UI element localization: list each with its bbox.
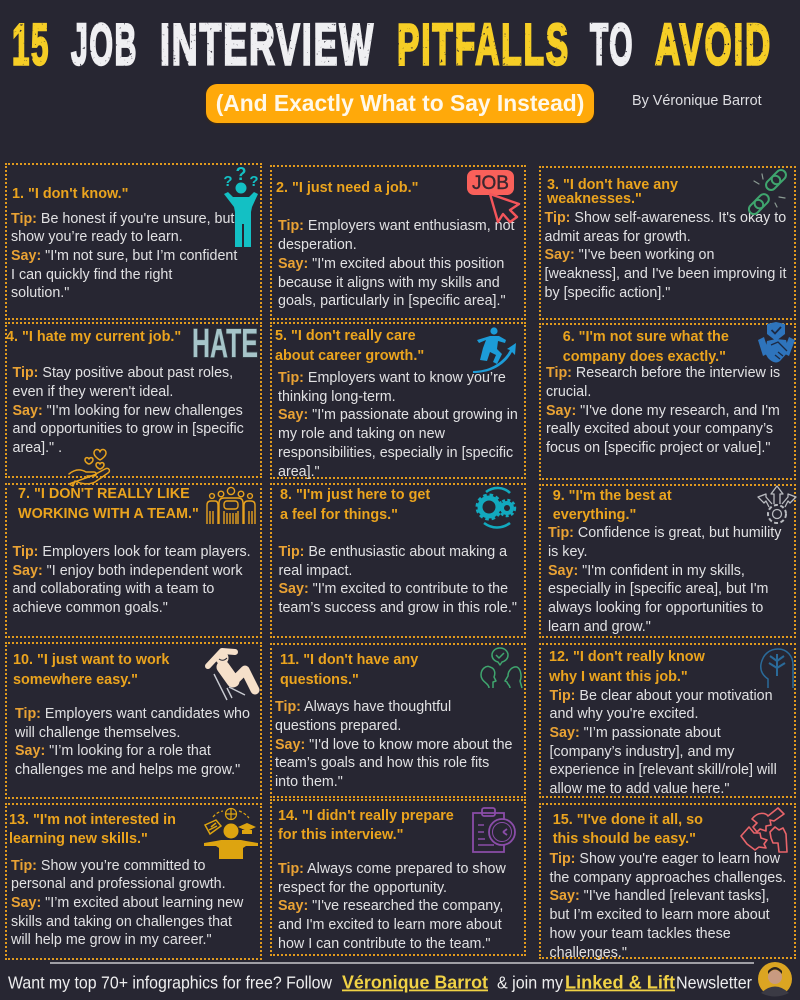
text 5 — [278, 370, 518, 480]
text 4 — [12, 365, 244, 456]
heading 5: about career growth." — [275, 348, 424, 364]
heading 10: somewhere easy." — [13, 672, 138, 688]
text 9: always looking for opportunities to — [548, 600, 763, 616]
text 11: team’s goals and how this role fits — [275, 755, 489, 771]
subtitle pill: (And Exactly What to Say Instead) — [216, 90, 584, 116]
panel: pitfall 13 — [5, 803, 262, 960]
heading 15 — [553, 811, 703, 850]
title: 15 — [12, 12, 50, 78]
icon: team — [206, 486, 256, 524]
heading 8 — [280, 487, 430, 523]
text 8: real impact. — [278, 563, 352, 579]
footer rule and call to action: Newsletter — [676, 972, 752, 992]
text 7: and collaborating with a team to — [12, 581, 214, 597]
panel: pitfall 10 — [5, 642, 262, 799]
text 15: the company approaches challenges. — [550, 870, 786, 886]
text 6: Tip: Research before the interview is — [546, 365, 780, 381]
text 10 — [15, 706, 250, 778]
panel: pitfall 9 — [539, 484, 796, 638]
text 6: Say: "I've done my research, and I'm — [546, 403, 780, 419]
icon: gear with arrows — [757, 485, 797, 524]
text 3: admit areas for growth. — [544, 229, 691, 245]
text 8 — [278, 544, 517, 616]
text 2: Say: "I'm excited about this position — [278, 256, 504, 272]
text 2: because it aligns with my skills and — [278, 274, 500, 290]
text 12: Say: "I’m passionate about — [550, 725, 721, 741]
text 13: personal and professional growth. — [11, 876, 226, 892]
text 3 — [544, 210, 786, 301]
text 15: Tip: Show you're eager to learn how — [550, 851, 780, 867]
text 7 — [12, 544, 251, 616]
title: JOB — [71, 12, 138, 78]
text 3: by [specific action]." — [544, 285, 670, 301]
text 8: Tip: Be enthusiastic about making a — [278, 544, 507, 560]
text 12: and why you're excited. — [550, 706, 698, 722]
text 8: Say: "I'm excited to contribute to the — [278, 581, 508, 597]
heading 13: 13. "I'm not interested in — [9, 812, 176, 828]
text 9: learn and grow." — [548, 619, 651, 635]
text 11: Tip: Always have thoughtful — [275, 699, 451, 715]
heading 9: 9. "I'm the best at — [553, 488, 672, 504]
icon: head with plant — [760, 648, 794, 688]
text 3: Tip: Show self-awareness. It's okay to — [544, 210, 786, 226]
footer rule and call to action: Véronique Barrot — [342, 972, 488, 992]
panel: pitfall 14 — [270, 799, 526, 956]
heading 8: a feel for things." — [280, 507, 398, 523]
heading 14 — [278, 808, 454, 843]
title — [12, 12, 772, 78]
heading 11 — [280, 652, 418, 688]
text 9: especially in [specific area], but I'm — [548, 581, 768, 597]
text 9: Tip: Confidence is great, but humility — [548, 525, 781, 541]
icon: hand with hearts — [68, 448, 110, 487]
text 10: Tip: Employers want candidates who — [15, 706, 250, 722]
text 9 — [548, 525, 782, 635]
heading 15: this should be easy." — [553, 831, 696, 847]
text 6 — [546, 365, 780, 456]
text 13: Say: "I’m excited about learning new — [11, 895, 243, 911]
panel: pitfall 7 — [5, 483, 262, 638]
text 15 — [550, 850, 786, 962]
text 6: focus on [specific project or value]." — [546, 440, 770, 456]
author avatar — [758, 962, 792, 996]
heading 12 — [549, 649, 705, 685]
heading 7: WORKING WITH A TEAM." — [18, 506, 199, 522]
icon: gears — [476, 486, 516, 529]
heading 10 — [13, 652, 170, 688]
text 12: allow me to add value here." — [550, 781, 729, 797]
footer rule and call to action: Linked & Lift — [565, 972, 675, 992]
icon: confused person: ? — [236, 164, 246, 184]
heading 14: 14. "I didn't really prepare — [278, 808, 454, 824]
heading 6 — [563, 329, 729, 364]
text 2: goals, particularly in [specific area]." — [278, 293, 506, 309]
heading 13: learning new skills." — [9, 831, 148, 847]
text 7: Say: "I enjoy both independent work — [12, 563, 243, 579]
icon: job cursor — [467, 170, 520, 224]
byline: By Véronique Barrot — [632, 93, 762, 109]
icon: broken chain — [748, 169, 787, 216]
text 2 — [278, 218, 515, 309]
text 5: Say: "I'm passionate about growing in — [278, 407, 518, 423]
text 3: [weakness], and I've been improving it — [544, 266, 786, 282]
heading 3: weaknesses." — [547, 191, 642, 207]
heading 5 — [275, 328, 424, 364]
heading 9 — [553, 488, 672, 523]
heading 11: 11. "I don't have any — [280, 652, 418, 668]
text 13: Tip: Show you’re committed to — [11, 858, 205, 874]
text 1: Tip: Be honest if you're unsure, but — [11, 211, 234, 227]
heading 5: 5. "I don't really care — [275, 328, 416, 344]
heading 13 — [9, 812, 176, 847]
text 4: and opportunities to grow in [specific — [12, 421, 244, 437]
heading 6: 6. "I'm not sure what the — [563, 329, 729, 345]
text 10: will challenge themselves. — [15, 725, 180, 741]
heading 4: 4. "I hate my current job." — [6, 329, 181, 345]
text 5: area]." — [278, 464, 320, 480]
icon: two heads talking — [480, 647, 523, 688]
text 6: crucial. — [546, 384, 591, 400]
text 14: Tip: Always come prepared to show — [278, 861, 506, 877]
icon: confused person: ? — [249, 173, 259, 190]
text 15: but I’m excited to learn more about — [550, 907, 770, 923]
icon: handshake shield — [758, 322, 795, 362]
text 3: Say: "I've been working on — [544, 247, 714, 263]
text 11: Say: "I'd love to know more about the — [275, 737, 512, 753]
text 11 — [275, 699, 512, 790]
title: PITFALLS — [397, 12, 570, 78]
text 2: Tip: Employers want enthusiasm, not — [278, 218, 515, 234]
text 1: Say: "I'm not sure, but I’m confident — [11, 248, 237, 264]
footer rule and call to action: Want my top 70+ infographics for free? Follow — [8, 972, 332, 992]
heading 6: company does exactly." — [563, 348, 726, 364]
heading 11: questions." — [280, 672, 359, 688]
heading 2: 2. "I just need a job." — [276, 180, 418, 196]
text 4: Say: "I'm looking for new challenges — [12, 403, 243, 419]
icon: confused person: ? — [223, 173, 233, 190]
icon: puzzle hands — [740, 807, 788, 853]
text 13: will help me grow in my career." — [11, 932, 212, 948]
icon: person with learning items — [204, 808, 258, 859]
heading 15: 15. "I've done it all, so — [553, 812, 703, 828]
text 12: experience in [relevant skill/role] will — [550, 762, 777, 778]
panel: pitfall 3 — [539, 166, 796, 320]
text 9: is key. — [548, 544, 587, 560]
heading 9: everything." — [553, 507, 636, 523]
text 6: really excited about your company’s — [546, 421, 773, 437]
text 5: responsibilities, especially in [specific — [278, 445, 513, 461]
text 14: how I can contribute to the team." — [278, 936, 490, 952]
panel: pitfall 15 — [539, 803, 796, 959]
text 9: Say: "I'm confident in my skills, — [548, 563, 745, 579]
icon: climbing runner — [473, 327, 516, 373]
panel: pitfall 5 — [270, 322, 526, 479]
text 5: Tip: Employers want to know you’re — [278, 370, 506, 386]
panel: pitfall 2 — [270, 165, 526, 320]
text 1: solution." — [11, 285, 69, 301]
title: TO — [590, 12, 634, 78]
icon: clipboard with clock — [472, 807, 518, 853]
heading 7: 7. "I DON'T REALLY LIKE — [18, 486, 190, 502]
text 13 — [11, 858, 244, 948]
text 10: Say: "I’m looking for a role that — [15, 743, 211, 759]
panel: pitfall 6 — [539, 323, 796, 480]
text 11: questions prepared. — [275, 718, 401, 734]
icon: relaxed man — [205, 648, 260, 700]
text 15: how your team tackles these — [550, 926, 731, 942]
text 15: challenges." — [550, 945, 627, 961]
panel: pitfall 12 — [539, 643, 796, 798]
panel: pitfall 8 — [270, 483, 526, 638]
heading 14: for this interview." — [278, 827, 403, 843]
text 7: Tip: Employers look for team players. — [12, 544, 251, 560]
text 14: and I'm excited to learn more about — [278, 917, 502, 933]
text 10: challenges me and helps me grow." — [15, 762, 240, 778]
text 2: desperation. — [278, 237, 357, 253]
text 4: even if they weren't ideal. — [12, 384, 173, 400]
text 1 — [11, 211, 238, 301]
panel: pitfall 11 — [270, 643, 526, 798]
heading 10: 10. "I just want to work — [13, 652, 169, 668]
icon: job cursor: JOB — [472, 173, 509, 194]
text 14: Say: "I've researched the company, — [278, 898, 503, 914]
footer rule and call to action: & join my — [497, 972, 563, 992]
heading 12: why I want this job." — [549, 669, 688, 685]
text 12 — [550, 688, 777, 797]
icon: confused person — [223, 164, 259, 247]
text 14: respect for the opportunity. — [278, 880, 447, 896]
text 1: show you’re ready to learn. — [11, 229, 183, 245]
text 11: into them." — [275, 774, 343, 790]
text 5: thinking long-term. — [278, 389, 396, 405]
heading 3 — [547, 177, 678, 207]
heading 12: 12. "I don't really know — [549, 649, 705, 665]
text 15: Say: "I've handled [relevant tasks], — [550, 888, 770, 904]
footer rule and call to action — [0, 960, 800, 1000]
text 13: skills and taking on challenges that — [11, 914, 232, 930]
panel: pitfall 4 — [5, 322, 262, 478]
icon: hate lettering: HATE — [192, 320, 258, 366]
subtitle pill — [206, 84, 594, 123]
heading 3: 3. "I don't have any — [547, 177, 678, 193]
heading 1: 1. "I don't know." — [12, 186, 128, 202]
heading 8: 8. "I'm just here to get — [280, 487, 430, 503]
text 4: area]." . — [12, 440, 62, 456]
heading 7 — [18, 486, 199, 522]
panel: pitfall 1 — [5, 163, 262, 320]
text 12: [company’s industry], and my — [550, 744, 734, 760]
text 1: I can quickly find the right — [11, 267, 172, 283]
text 14 — [278, 861, 506, 952]
text 12: Tip: Be clear about your motivation — [550, 688, 773, 704]
text 8: team’s success and grow in this role." — [278, 600, 517, 616]
text 5: my role and taking on new — [278, 426, 445, 442]
text 4: Tip: Stay positive about past roles, — [12, 365, 233, 381]
title: INTERVIEW — [160, 12, 375, 78]
text 7: achieve common goals." — [12, 600, 168, 616]
